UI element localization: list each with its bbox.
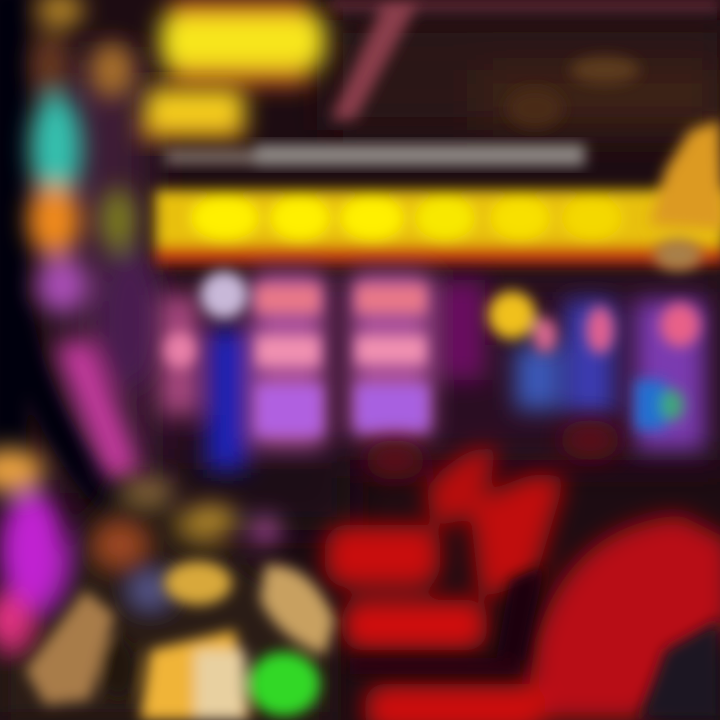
dark chair gaps xyxy=(350,565,720,720)
second sign xyxy=(140,88,245,140)
yellow lit band xyxy=(155,190,720,264)
wheel arc colours xyxy=(28,0,162,485)
red chairs xyxy=(325,420,720,720)
left black column xyxy=(0,0,150,530)
slot machine screens xyxy=(164,271,700,435)
slot machines xyxy=(160,272,705,470)
lower-left console xyxy=(0,448,330,720)
ceiling beams xyxy=(330,0,720,128)
top sign xyxy=(160,0,325,86)
ceiling and background tones xyxy=(60,20,720,530)
grey text strip xyxy=(165,144,585,166)
console buttons xyxy=(25,561,335,720)
gold peak xyxy=(650,120,720,271)
